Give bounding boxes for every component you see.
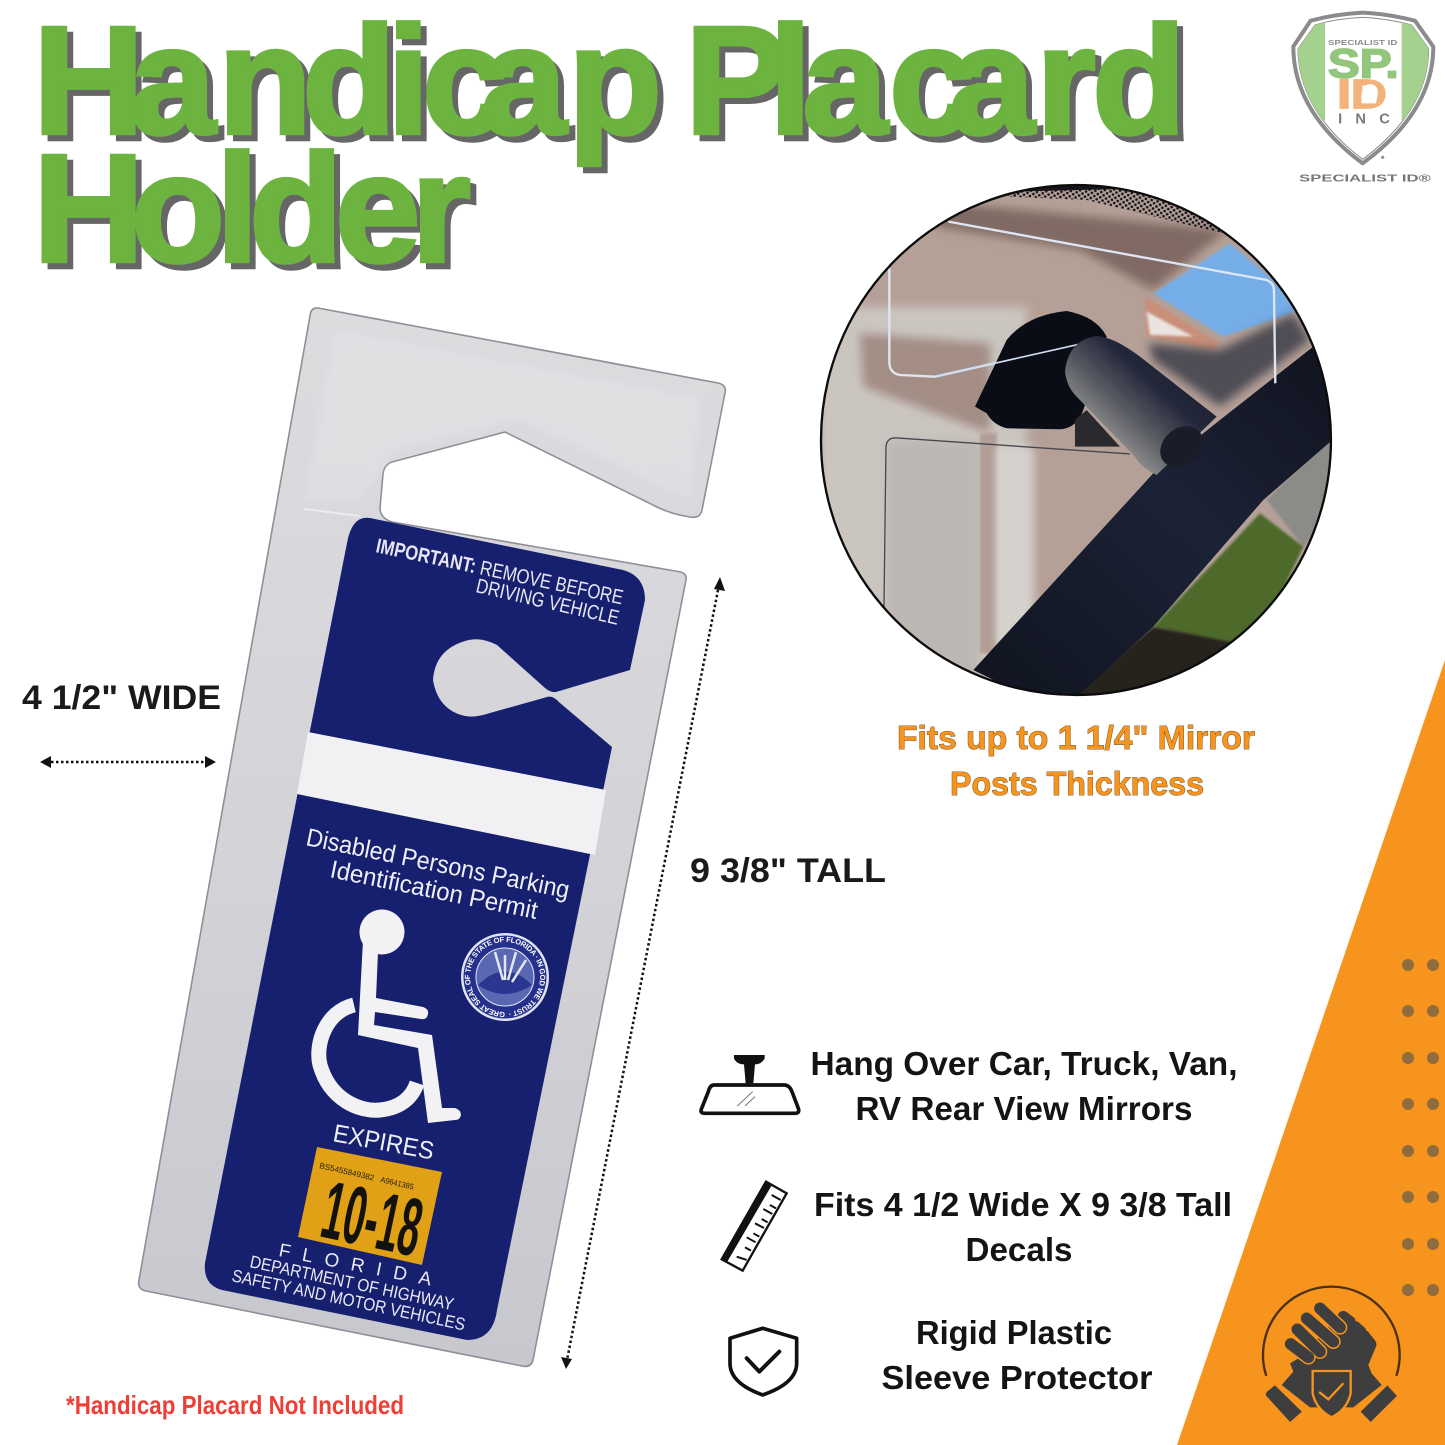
feature text: rigid plastic (882, 1314, 1153, 1396)
feature text: decal fit: Decals (966, 1231, 1072, 1268)
icon: rear view mirror (701, 1055, 799, 1113)
title shadow: Holder (39, 128, 477, 300)
product: clear placard sleeve with permit (138, 307, 726, 1368)
caption: mirror post thickness: Fits up to 1 1/4" Mirror (897, 720, 1255, 757)
feature text: decal fit (814, 1186, 1232, 1268)
issuing authority text: DEPARTMENT OF HIGHWAY (248, 1251, 456, 1314)
lower clear sleeve edge (884, 438, 1130, 607)
icon: ruler (722, 1182, 787, 1271)
permit header text: DRIVING VEHICLE (474, 574, 621, 630)
expires label: EXPIRES (331, 1119, 436, 1165)
icon: wheelchair symbol (319, 910, 461, 1123)
title shadow: Handicap Placard (39, 0, 1192, 172)
white band (297, 732, 606, 855)
permit name text: Disabled Persons Parking (304, 823, 572, 904)
logo: Specialist ID shield: ID (1337, 71, 1387, 117)
icon: Florida state seal: GREAT SEAL OF THE STATE OF FLORIDA · IN GOD WE TRUST · (464, 936, 546, 1018)
windshield frit dots (1000, 187, 1223, 233)
sleeve top highlight (305, 330, 700, 500)
expiration sticker: A9641385 (380, 1175, 415, 1192)
height label: 9 3/8" TALL (690, 852, 886, 890)
dark pillar (973, 347, 1340, 700)
arrow: width dimension (40, 756, 216, 768)
cylinder arm (1065, 336, 1217, 475)
pocket edge (304, 509, 360, 516)
expiration sticker (298, 1147, 442, 1274)
issuing authority text: FLORIDA (277, 1240, 434, 1291)
blue permit card (205, 518, 645, 1340)
feature text: mirror fit (810, 1045, 1238, 1127)
issuing authority text: SAFETY AND MOTOR VEHICLES (230, 1265, 467, 1334)
caption: mirror post thickness: Posts Thickness (950, 766, 1204, 803)
feature text: rigid plastic: Sleeve Protector (882, 1359, 1153, 1396)
note: placard not included: *Handicap Placard Not Included (66, 1390, 404, 1420)
title shadow (39, 0, 1192, 300)
photo ring border (821, 185, 1331, 695)
caption: mirror post thickness (897, 720, 1255, 803)
logo: Specialist ID shield: INC (1338, 111, 1390, 127)
icon: clasped hands with shield (1263, 1287, 1400, 1423)
logo: Specialist ID shield: SPECIALIST ID (1328, 40, 1397, 47)
logo: Specialist ID shield: SPECIALIST ID® (1299, 173, 1432, 184)
issuing authority text (230, 1240, 467, 1334)
title (33, 0, 1192, 300)
expiration sticker: 10-18 (314, 1165, 430, 1274)
orange corner triangle (1177, 660, 1445, 1445)
clear vinyl sleeve (139, 308, 725, 1366)
permit header text: IMPORTANT: REMOVE BEFORE (374, 534, 625, 609)
title text: Holder (33, 122, 471, 294)
icon: shield with check (730, 1328, 797, 1395)
window reflection sky (1153, 243, 1297, 337)
wall and eave (820, 180, 1340, 700)
feature text: rigid plastic: Rigid Plastic (916, 1314, 1112, 1351)
arrow: height dimension (561, 577, 725, 1369)
logo: Specialist ID shield (1293, 13, 1433, 184)
feature text: decal fit: Fits 4 1/2 Wide X 9 3/8 Tall (814, 1186, 1232, 1223)
feature text: mirror fit: Hang Over Car, Truck, Van, (810, 1045, 1238, 1082)
black mirror mount (975, 311, 1107, 429)
expiration sticker: BS5455849382 (319, 1161, 376, 1183)
width label: 4 1/2" WIDE (22, 679, 221, 717)
mount clear-sleeve crossing (935, 343, 1083, 377)
permit name text: Identification Permit (328, 855, 540, 925)
decorative dot grid (1402, 959, 1439, 1296)
lower outdoors (1266, 442, 1330, 546)
upper clear sleeve edge (889, 222, 1275, 383)
feature text: mirror fit: RV Rear View Mirrors (856, 1090, 1192, 1127)
photo: holder mounted on mirror post (820, 180, 1340, 700)
logo: Specialist ID shield: SP. (1328, 41, 1399, 87)
title text (33, 0, 1186, 294)
